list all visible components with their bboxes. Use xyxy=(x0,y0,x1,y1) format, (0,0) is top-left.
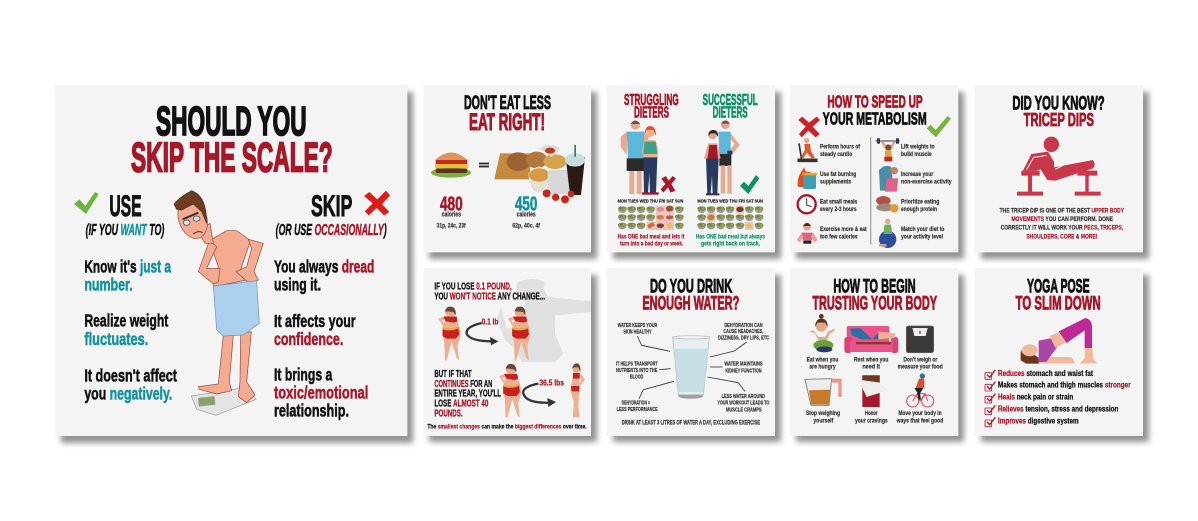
title: ENOUGH WATER? xyxy=(642,294,739,315)
leader lines xyxy=(637,336,747,399)
illustration: successful couple xyxy=(704,120,740,195)
skip reasons: It affects your xyxy=(274,311,356,331)
paragraph xyxy=(434,369,501,420)
illustration: water glass xyxy=(673,336,709,399)
icon: burger xyxy=(431,152,471,178)
caption: The smallest changes can make the biggest differences over time. xyxy=(427,423,587,430)
icon: red cross xyxy=(661,176,676,193)
title: DON'T EAT LESS xyxy=(464,93,551,114)
left column tips: every 2-3 hours xyxy=(820,206,857,213)
paragraph: POUNDS. xyxy=(434,409,463,420)
panel: small changes xyxy=(423,268,591,436)
description: MOVEMENTS YOU CAN PERFORM. DONE xyxy=(1011,216,1113,223)
caption: successful: Has ONE bad meal but always xyxy=(696,234,766,240)
benefits checklist: Makes stomach and thigh muscles stronger xyxy=(998,381,1131,390)
panel: struggling vs successful dieters xyxy=(607,85,775,252)
weekly meal grid: successful xyxy=(697,198,763,230)
panel: tricep dips xyxy=(975,85,1143,252)
right column tips: build muscle xyxy=(901,151,932,158)
callouts: DEHYDRATION = xyxy=(622,400,650,406)
icon: daily activity xyxy=(879,166,898,192)
use heading: USE xyxy=(109,190,142,223)
caption: struggling xyxy=(618,234,684,248)
heading: YOU WON'T NOTICE ANY CHANGE... xyxy=(434,291,545,302)
stat: 480 calories: 31p, 24c, 23f xyxy=(437,224,466,230)
right column tips: enough protein xyxy=(901,206,937,213)
use reasons: number. xyxy=(84,274,133,294)
benefits checklist: Relieves tension, stress and depression xyxy=(998,404,1118,413)
labels row one xyxy=(807,356,943,371)
use heading: (IF YOU WANT TO) xyxy=(86,222,164,239)
heading: struggling xyxy=(624,92,679,122)
icon: black bathroom scale xyxy=(906,326,934,353)
illustration: healthy food xyxy=(494,145,585,203)
use reasons: you negatively. xyxy=(84,384,172,404)
panel: trusting your body xyxy=(790,268,958,436)
arrow: 0.1 lb xyxy=(467,317,498,345)
title: YOGA POSE xyxy=(1027,277,1090,298)
arrow: 36.5 lbs xyxy=(523,377,564,407)
callouts: NUTRIENTS INTO THE xyxy=(616,368,657,374)
labels row one: measure your food xyxy=(898,364,943,371)
labels row two: yourself xyxy=(813,418,834,425)
title: TO SLIM DOWN xyxy=(1016,294,1101,315)
icon: rest on sofa xyxy=(844,326,898,353)
benefits checklist xyxy=(985,369,1131,427)
heading: IF YOU LOSE 0.1 POUND, xyxy=(434,281,512,292)
use reasons: It doesn't affect xyxy=(84,366,177,386)
description: THE TRICEP DIP IS ONE OF THE BEST UPPER BODY xyxy=(1000,208,1124,215)
stat: 480 calories: calories xyxy=(442,212,461,219)
title: HOW TO SPEED UP xyxy=(827,92,923,112)
stat: 450 calories xyxy=(512,193,540,230)
benefits checklist: Reduces stomach and waist fat xyxy=(998,369,1093,378)
callouts: CAUSE HEADACHES, xyxy=(723,329,764,335)
icon: fat burner xyxy=(798,167,817,189)
title xyxy=(1016,277,1101,315)
labels row one: Don't weigh or xyxy=(903,356,938,363)
left column tips: supplements xyxy=(820,179,851,186)
heading: struggling: DIETERS xyxy=(634,105,669,122)
skip reasons: It brings a xyxy=(274,364,333,384)
title xyxy=(642,277,739,315)
skip reasons: confidence. xyxy=(274,329,343,349)
icon: measuring jug xyxy=(805,379,842,405)
icon: red cross xyxy=(798,117,820,137)
arrow: 36.5 lbs: 36.5 lbs xyxy=(539,377,564,387)
left column tips: too few calories xyxy=(820,234,858,241)
icon: tricep dip figure xyxy=(1017,137,1101,196)
icon: green check xyxy=(74,192,99,214)
icon: tired woman xyxy=(797,223,818,244)
right column tips: non-exercise activity xyxy=(901,179,952,186)
icon: green check xyxy=(927,116,951,137)
callouts: LESS WATER AROUND xyxy=(722,394,765,400)
description: CORRECTLY IT WILL WORK YOUR PECS, TRICEPS, xyxy=(1001,225,1123,232)
callouts: MUSCLE CRAMPS xyxy=(726,407,762,413)
labels row one: Rest when you xyxy=(854,356,888,363)
weekly meal grid: struggling: MON TUES WED THU FRI SAT SUN xyxy=(618,198,684,204)
right column tips: Match your diet to xyxy=(901,226,944,233)
labels row one: Eat when you xyxy=(807,356,838,363)
icon: treadmill runner xyxy=(798,138,817,161)
caption: successful xyxy=(696,234,766,248)
left column tips xyxy=(820,143,867,241)
skip reasons: You always dread xyxy=(274,257,374,277)
icon: exercise ball xyxy=(879,219,896,248)
weekly meal grid: struggling xyxy=(618,198,684,230)
skip reasons xyxy=(274,257,374,420)
caption: successful: gets right back on track. xyxy=(701,242,760,248)
panel: don't eat less xyxy=(423,85,591,252)
heading xyxy=(434,281,545,302)
equals sign xyxy=(479,163,489,167)
skip heading: SKIP xyxy=(311,190,352,223)
use heading xyxy=(86,190,164,239)
use reasons: Realize weight xyxy=(84,311,168,331)
labels row two xyxy=(806,410,943,425)
icon: cyclist xyxy=(907,373,934,407)
icon: weight lifter xyxy=(876,138,900,161)
left column tips: Eat small meals xyxy=(820,198,858,205)
right column tips xyxy=(901,143,952,241)
callouts: BLOOD xyxy=(630,374,643,380)
use reasons xyxy=(84,257,177,404)
right column tips: Increase your xyxy=(901,171,934,178)
divider xyxy=(869,137,872,244)
callouts: WATER MAINTAINS xyxy=(724,362,763,368)
stat: 450 calories: calories xyxy=(517,212,536,219)
title: TRICEP DIPS xyxy=(1024,109,1094,130)
title: DO YOU DRINK xyxy=(650,277,732,298)
description xyxy=(1000,208,1124,241)
panel: do you drink enough water xyxy=(607,268,775,436)
callouts: IT HELPS TRANSPORT xyxy=(616,361,658,367)
weekly meal grid: successful: MON TUES WED THU FRI SAT SUN xyxy=(697,198,763,204)
callouts: DEHYDRATION CAN xyxy=(724,323,763,329)
title xyxy=(1012,93,1105,130)
title: TRUSTING YOUR BODY xyxy=(812,294,937,315)
illustration: heavy woman xyxy=(499,364,521,418)
right column tips: your activity level xyxy=(901,234,943,241)
callouts: LESS PERFORMANCE xyxy=(617,407,658,413)
illustration: struggling couple xyxy=(621,120,659,195)
illustration: man on scale xyxy=(173,191,263,415)
stat: 450 calories: 450 xyxy=(515,193,537,216)
labels row two: Move your body in xyxy=(898,410,942,417)
paragraph: ENTIRE YEAR, YOU'LL xyxy=(434,389,501,400)
caption: struggling: Has ONE bad meal and lets it xyxy=(618,234,684,240)
icon: red cross xyxy=(364,191,390,215)
left column tips: Perform hours of xyxy=(820,143,861,150)
skip reasons: using it. xyxy=(274,274,321,294)
heading: successful: SUCCESSFUL xyxy=(703,92,758,109)
left column tips: Use fat burning xyxy=(820,171,856,178)
heading: successful xyxy=(703,92,758,122)
callouts: KIDNEY FUNCTION xyxy=(725,368,762,374)
stat: 480 calories xyxy=(437,193,466,230)
description: SHOULDERS, CORE & MORE! xyxy=(1026,234,1097,241)
illustration: background silhouette xyxy=(497,279,591,362)
panel: should you skip the scale xyxy=(55,85,407,436)
paragraph: BUT IF THAT xyxy=(434,369,472,380)
labels row two: ways that feel good xyxy=(896,418,943,425)
skip reasons: relationship. xyxy=(274,400,349,420)
footer: DRINK AT LEAST 3 LITRES OF WATER A DAY, EXCLUDING EXERCISE xyxy=(622,420,760,427)
icon: woman eating xyxy=(809,314,835,352)
title: HOW TO BEGIN xyxy=(833,277,916,298)
stat: 480 calories: 480 xyxy=(440,193,463,216)
benefits checklist: Improves digestive system xyxy=(998,416,1079,425)
skip heading: (OR USE OCCASIONALLY) xyxy=(276,222,387,239)
callouts: YOUR WORKOUT LEADS TO xyxy=(717,401,770,407)
left column tips: Exercise more & eat xyxy=(820,226,867,233)
skip reasons: toxic/emotional xyxy=(274,382,368,402)
panel: yoga pose xyxy=(975,268,1143,436)
callouts xyxy=(616,323,770,413)
right column tips: Prioritize eating xyxy=(901,198,939,205)
callouts: DIZZINESS, DRY LIPS, ETC xyxy=(718,335,769,341)
use reasons: fluctuates. xyxy=(84,329,148,349)
panel: speed up your metabolism xyxy=(790,85,958,252)
paragraph: CONTINUES FOR AN xyxy=(434,379,492,390)
title xyxy=(131,98,333,181)
use reasons: Know it's just a xyxy=(84,257,172,277)
icon: green check xyxy=(740,175,759,194)
title xyxy=(812,277,937,315)
icon: clock xyxy=(798,195,816,213)
callouts: WATER KEEPS YOUR xyxy=(618,323,657,329)
labels row two: Honor xyxy=(865,410,878,417)
skip heading xyxy=(276,190,387,239)
callouts: SKIN HEALTHY xyxy=(623,329,652,335)
labels row two: Stop weighing xyxy=(806,410,840,417)
arrow: 0.1 lb: 0.1 lb xyxy=(482,317,498,327)
title: EAT RIGHT! xyxy=(469,109,545,136)
illustration: bridge pose xyxy=(1021,318,1097,364)
labels row one: need it xyxy=(862,364,881,371)
labels row one: are hungry xyxy=(809,364,836,371)
left column tips: steady cardio xyxy=(820,151,852,158)
panel shadows xyxy=(61,92,1149,443)
right column tips: Lift weights to xyxy=(901,143,935,150)
labels row two: your cravings xyxy=(855,418,888,425)
benefits checklist: Heals neck pain or strain xyxy=(998,393,1073,402)
title: SKIP THE SCALE? xyxy=(131,135,333,181)
illustration: slim woman xyxy=(570,363,585,417)
icon: protein foods xyxy=(876,196,899,213)
caption: struggling: turn into a bad day or week. xyxy=(620,242,684,248)
heading: struggling: STRUGGLING xyxy=(624,92,679,109)
heading: successful: DIETERS xyxy=(713,105,748,122)
title: YOUR METABOLISM xyxy=(823,108,927,128)
paragraph: LOSE ALMOST 40 xyxy=(434,399,489,410)
illustration: women before and after 0.1 lb xyxy=(438,307,530,360)
stat: 450 calories: 62p, 40c, 4f xyxy=(512,224,540,230)
icon: chocolate bar xyxy=(857,375,888,407)
title: DID YOU KNOW? xyxy=(1012,93,1105,114)
title xyxy=(823,92,927,128)
title xyxy=(464,93,551,136)
title: SHOULD YOU xyxy=(156,98,307,144)
